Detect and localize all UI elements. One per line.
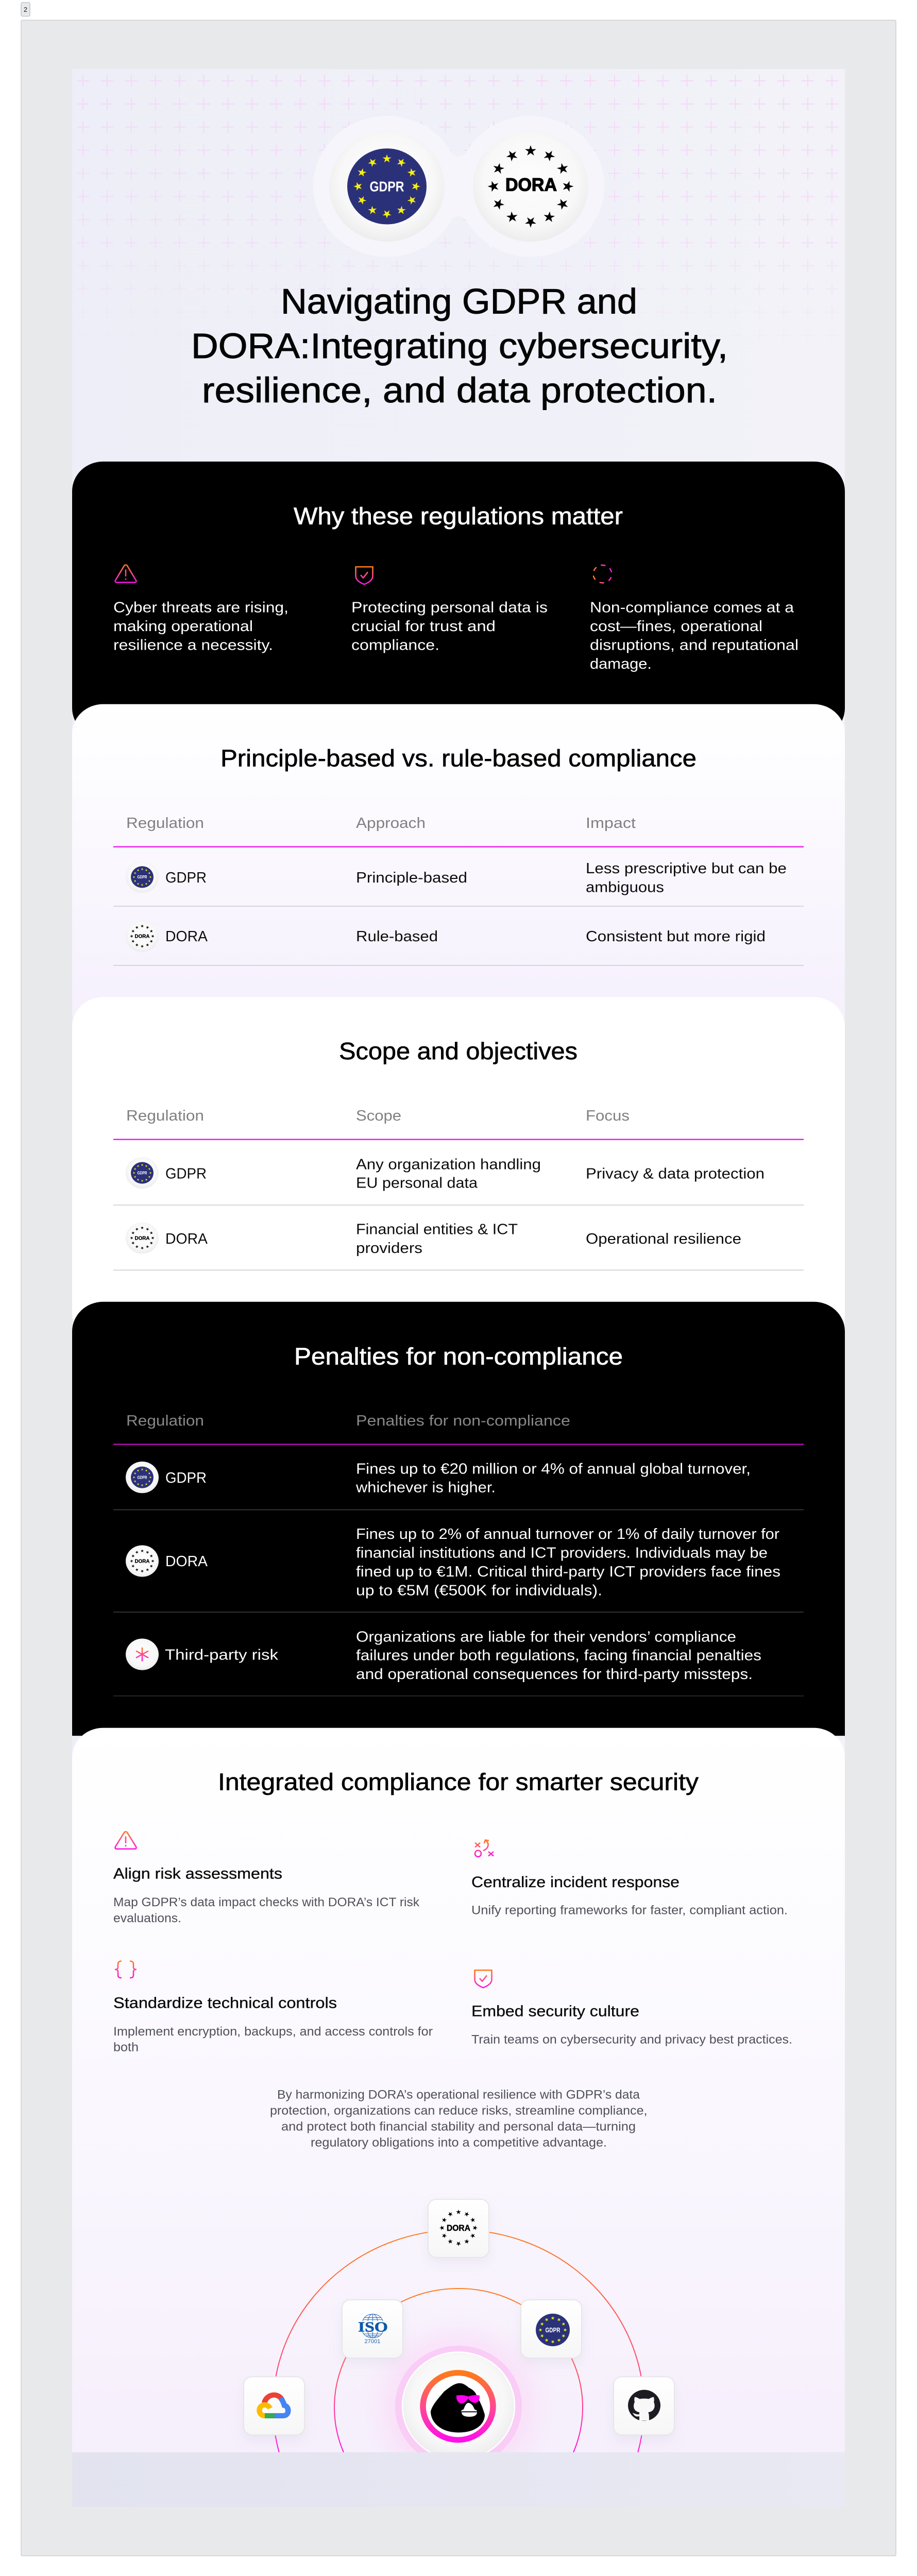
row: GDPR penalties: whichever is higher. — [355, 1479, 496, 1496]
row: DORA: Consistent but more rigid — [586, 928, 766, 945]
row: GDPR penalties — [126, 1461, 751, 1496]
card: GDPR: GDPR — [545, 2326, 560, 2334]
item: align risk assessments: Align risk assessments — [113, 1866, 282, 1882]
panel: penalties for non-compliance — [72, 1302, 845, 1736]
heading: Scope and objectives — [339, 1038, 578, 1064]
bottom fade band — [72, 2452, 845, 2507]
logo pair: GDPR and DORA — [313, 116, 604, 257]
table header — [126, 1108, 630, 1124]
table header: Regulation — [126, 1413, 204, 1429]
text: non-compliance cost: Non-compliance comes at a — [590, 599, 794, 616]
row: DORA — [126, 921, 766, 952]
row: GDPR: Privacy & data protection — [586, 1165, 765, 1182]
row: GDPR: GDPR — [137, 874, 147, 879]
heading: Why these regulations matter — [294, 502, 623, 529]
closing paragraph: regulatory obligations into a competitive advantage. — [311, 2136, 607, 2149]
text: non-compliance cost: disruptions, and reputational — [590, 637, 799, 653]
row: GDPR: Less prescriptive but can be — [586, 860, 787, 877]
row: GDPR — [126, 1156, 765, 1192]
closing paragraph — [270, 2088, 647, 2149]
row: DORA: Operational resilience — [586, 1230, 741, 1247]
text: non-compliance cost: cost—fines, operational — [590, 618, 762, 635]
closing paragraph: protection, organizations can reduce risks, streamline compliance, — [270, 2104, 648, 2117]
card: ISO 27001: 27001 — [364, 2338, 380, 2345]
icon: shield check — [355, 567, 373, 584]
item: centralize incident response — [471, 1840, 788, 1917]
row: GDPR penalties: GDPR — [137, 1475, 147, 1480]
text: protecting personal data: crucial for trust and — [351, 618, 496, 635]
row: GDPR — [126, 860, 787, 895]
row: DORA penalties: fined up to €1M. Critical third-party ICT providers face fines — [356, 1563, 780, 1580]
item: embed security culture — [471, 1970, 792, 2046]
logo: DORA: DORA — [505, 174, 557, 195]
row: DORA: providers — [356, 1240, 422, 1257]
row: DORA penalties: financial institutions and ICT providers. Individuals may be — [356, 1545, 768, 1561]
row: GDPR: ambiguous — [586, 879, 664, 895]
item: centralize incident response: Unify reporting frameworks for faster, compliant action. — [471, 1904, 788, 1917]
icon: dashed circle — [592, 564, 613, 584]
table header — [126, 1413, 570, 1429]
heading: Integrated compliance for smarter security — [218, 1768, 699, 1795]
text: non-compliance cost — [590, 599, 799, 672]
text: protecting personal data — [351, 599, 548, 653]
logo: GDPR: GDPR — [370, 179, 404, 195]
page number button — [21, 3, 30, 16]
card: GDPR — [521, 2300, 582, 2358]
icon: warning triangle — [115, 565, 136, 582]
row: third-party risk — [126, 1629, 761, 1683]
card: ISO 27001 — [342, 2300, 403, 2358]
title: Navigating GDPR and — [281, 281, 637, 321]
row: DORA: Rule-based — [356, 928, 438, 945]
row: GDPR: EU personal data — [356, 1175, 478, 1192]
panel: why these regulations matter — [72, 462, 845, 738]
logo: GDPR — [329, 131, 445, 242]
row: DORA penalties — [126, 1526, 780, 1599]
row: third-party risk: failures under both regulations, facing financial penalties — [356, 1647, 761, 1664]
infographic background — [72, 69, 845, 2466]
row: GDPR: GDPR — [165, 1165, 207, 1182]
table header — [126, 815, 636, 832]
page number button: 2 — [24, 6, 27, 13]
heading: Principle-based vs. rule-based compliance — [220, 744, 697, 771]
item: align risk assessments — [113, 1832, 420, 1925]
closing paragraph: By harmonizing DORA’s operational resilience with GDPR’s data — [277, 2088, 640, 2102]
heading: Penalties for non-compliance — [294, 1343, 623, 1369]
text: cyber threats: making operational — [113, 618, 253, 635]
orbit rings — [273, 2230, 644, 2453]
item: standardize technical controls: Implement encryption, backups, and access controls for — [113, 2025, 433, 2039]
row: third-party risk: and operational consequences for third-party missteps. — [356, 1666, 753, 1683]
text: cyber threats: Cyber threats are rising, — [113, 599, 288, 616]
center glow and badge — [361, 2313, 556, 2500]
card: ISO 27001: ISO — [358, 2319, 388, 2335]
card: Google Cloud — [244, 2377, 304, 2435]
item: standardize technical controls — [113, 1961, 433, 2054]
row: GDPR penalties: GDPR — [165, 1470, 207, 1486]
lower frame — [72, 2507, 845, 2555]
title: resilience, and data protection. — [202, 370, 717, 410]
row: GDPR penalties: Fines up to €20 million or 4% of annual global turnover, — [356, 1461, 751, 1477]
diagram: orbit of compliance logos — [244, 2199, 674, 2500]
row: DORA penalties: Fines up to 2% of annual turnover or 1% of daily turnover for — [356, 1526, 779, 1543]
panel: principle-based vs rule-based — [72, 704, 845, 1040]
text: cyber threats — [113, 599, 288, 653]
item: centralize incident response: Centralize incident response — [471, 1874, 680, 1891]
text: cyber threats: resilience a necessity. — [113, 637, 273, 653]
row: GDPR: Principle-based — [356, 870, 467, 886]
item: align risk assessments: evaluations. — [113, 1911, 181, 1925]
table header: Regulation — [126, 1108, 204, 1124]
panel: scope and objectives — [72, 997, 845, 1342]
row: DORA — [126, 1221, 741, 1257]
title: DORA:Integrating cybersecurity, — [191, 326, 728, 366]
table header: Regulation — [126, 815, 204, 832]
table header: Penalties for non-compliance — [356, 1413, 570, 1429]
panel: integrated compliance — [72, 1728, 845, 2500]
row: DORA: DORA — [165, 1230, 208, 1247]
icon: gorilla with glasses — [431, 2383, 485, 2432]
text: non-compliance cost: damage. — [590, 655, 652, 672]
table header: Focus — [586, 1108, 630, 1124]
row: DORA: DORA — [165, 928, 208, 945]
row: DORA penalties: DORA — [165, 1553, 208, 1570]
logo: DORA — [473, 131, 588, 242]
row: DORA penalties: up to €5M (€500K for individuals). — [356, 1582, 602, 1599]
row: DORA: Financial entities & ICT — [356, 1221, 518, 1238]
item: standardize technical controls: both — [113, 2041, 139, 2054]
closing paragraph: and protect both financial stability and personal data—turning — [281, 2120, 636, 2134]
row: DORA penalties: DORA — [135, 1559, 150, 1564]
row: GDPR: Any organization handling — [356, 1156, 541, 1173]
card: GitHub — [614, 2377, 674, 2435]
table header: Scope — [356, 1108, 401, 1124]
table header: Impact — [586, 815, 636, 832]
row: GDPR: GDPR — [165, 870, 207, 886]
row: DORA: DORA — [135, 1235, 150, 1241]
row: GDPR: GDPR — [137, 1171, 147, 1175]
row: third-party risk: Third-party risk — [165, 1647, 278, 1664]
item: standardize technical controls: Standardize technical controls — [113, 1995, 337, 2011]
text: protecting personal data: compliance. — [351, 637, 439, 653]
card: DORA: DORA — [447, 2223, 470, 2233]
item: embed security culture: Embed security culture — [471, 2003, 639, 2020]
item: embed security culture: Train teams on cybersecurity and privacy best practices. — [471, 2033, 792, 2046]
item: align risk assessments: Map GDPR’s data impact checks with DORA’s ICT risk — [113, 1896, 420, 1909]
table header: Approach — [356, 815, 426, 832]
card: DORA — [428, 2199, 489, 2258]
row: DORA: DORA — [135, 934, 150, 940]
text: protecting personal data: Protecting personal data is — [351, 599, 548, 616]
row: third-party risk: Organizations are liable for their vendors’ compliance — [356, 1629, 736, 1645]
title — [191, 281, 728, 410]
